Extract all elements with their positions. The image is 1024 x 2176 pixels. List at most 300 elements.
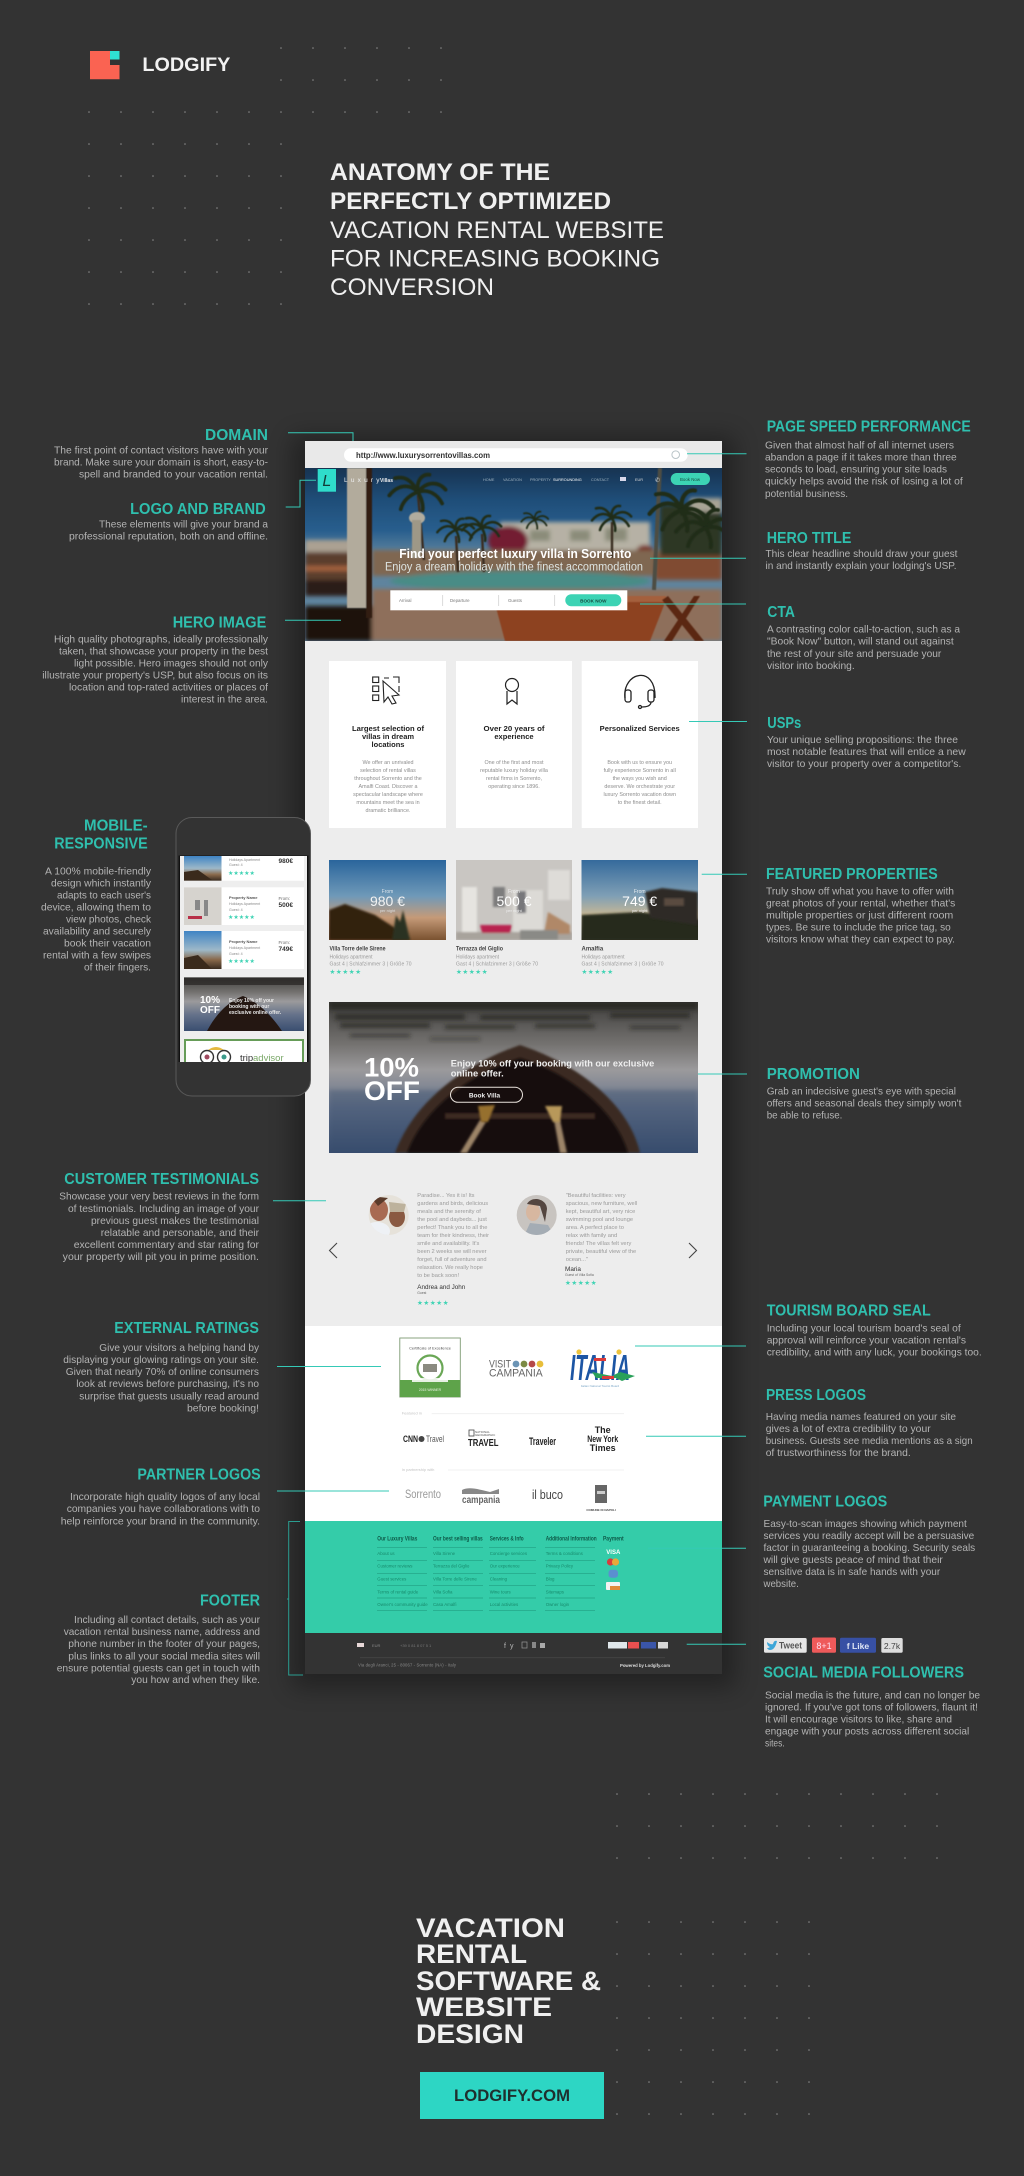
annotation: customer testimonials: excellent commentary and star rating for <box>74 1239 259 1251</box>
testimonials carousel: relaxation. We really hope <box>417 1265 483 1271</box>
teal footer: Our experience <box>490 1564 520 1569</box>
dark footer bar: Via degli Aranci, 25 - 80067 - Sorrento (NA) - Italy <box>358 1663 457 1668</box>
USP card 3: fully experience Sorrento in all <box>604 768 676 774</box>
certificate of excellence: Certificate of Excellence <box>409 1346 451 1350</box>
hero backdrop <box>305 498 722 641</box>
nav: CONTACT <box>591 478 610 482</box>
icon: grid and cursor <box>373 677 399 704</box>
featured property 2 <box>456 860 572 976</box>
annotation: press logos: PRESS LOGOS <box>766 1387 866 1404</box>
press logos: GEOGRAPHIC <box>475 1433 496 1437</box>
teal footer: Owner's community guide <box>377 1602 428 1607</box>
annotation: payment logos: services you readily accept will be a persuasive <box>764 1530 974 1542</box>
featured property 2: ★★★★★ <box>456 968 488 976</box>
website mockup <box>305 441 735 1674</box>
testimonials carousel: forget, full of adventure and <box>417 1257 487 1263</box>
annotation: featured properties: visitors know what they can expect to pay. <box>766 934 955 946</box>
mobile promo: OFF <box>200 1005 220 1016</box>
mobile promo: Enjoy 10% off your <box>229 998 274 1004</box>
annotation: external ratings: surprise that guests usually read around <box>79 1390 259 1402</box>
title: PERFECTLY OPTIMIZED <box>330 188 611 215</box>
featured property 3: Amalfia <box>582 947 604 953</box>
annotation: usps <box>767 715 966 770</box>
annotation: footer: vacation rental business name, address and <box>64 1626 260 1638</box>
testimonials carousel: ★★★★★ <box>417 1299 449 1307</box>
brand logo: LODGIFY <box>142 54 230 76</box>
annotation: usps: most notable features that will entice a new <box>767 746 966 758</box>
USP card 1: locations <box>372 740 404 749</box>
featured property 2: Holidays apartment <box>456 954 500 960</box>
annotation: customer testimonials: relatable and personable, and their <box>101 1227 259 1239</box>
annotation: customer testimonials: your property will pit you in prime position. <box>63 1251 259 1263</box>
teal footer: Owner login <box>546 1602 570 1607</box>
press logos: TRAVEL <box>468 1437 499 1449</box>
tourism seals <box>400 1338 635 1397</box>
featured property 1: 980 € <box>370 893 405 909</box>
annotation: external ratings <box>63 1320 260 1414</box>
hero image: EUR <box>635 478 643 482</box>
USP card 2 <box>456 661 572 828</box>
featured property 3: Gast 4 | Schlafzimmer 3 | Größe 70 <box>582 962 664 968</box>
annotation: press logos <box>766 1387 973 1459</box>
mobile listing 3: ★★★★★ <box>228 958 255 965</box>
icon: award ribbon <box>506 678 518 704</box>
USP card 1 <box>329 661 446 828</box>
connector lines left <box>273 433 389 1675</box>
annotation: social media followers: sites. <box>765 1737 785 1749</box>
teal footer: Privacy Policy <box>546 1564 574 1569</box>
dark footer bar <box>305 1633 722 1674</box>
teal footer: Villa Sofia <box>433 1589 453 1594</box>
icon: headset <box>625 675 655 708</box>
call to action: lodgify.com: LODGIFY.COM <box>454 2086 570 2105</box>
teal footer: Concierge services <box>490 1551 528 1556</box>
annotation: mobile-responsive: A 100% mobile-friendly <box>45 866 152 878</box>
italia logo: Italian National Tourist Board <box>581 1384 619 1388</box>
annotation: domain: DOMAIN <box>205 427 268 444</box>
featured property 3: 749 € <box>622 893 657 909</box>
dark footer bar: Powered by Lodgify.com <box>620 1663 670 1669</box>
closing headline: RENTAL <box>416 1939 527 1969</box>
annotation: mobile-responsive: adapts to each user's <box>57 890 151 902</box>
testimonials carousel: relax with family and <box>566 1233 617 1239</box>
annotation: press logos: Having media names featured on your site <box>766 1411 956 1423</box>
annotation: footer: plus links to all your social media sites will <box>68 1650 260 1662</box>
mobile listing 3: 749€ <box>278 946 293 953</box>
USP card 1: mountains meet the sea in <box>356 800 420 806</box>
annotation: footer: Including all contact details, such as your <box>74 1614 260 1626</box>
dark footer bar: EUR <box>372 1643 381 1648</box>
annotation: external ratings: look at reviews before purchasing, it's no <box>76 1378 259 1390</box>
annotation: promotion: be able to refuse. <box>767 1109 842 1121</box>
annotation: payment logos: factor in guaranteeing a booking. Security seals <box>764 1542 975 1554</box>
avatar two <box>516 1195 558 1236</box>
dark footer bar: +39 0 81 8 07 5 1 <box>400 1643 432 1648</box>
visit campania logo: VISIT <box>489 1359 511 1371</box>
annotation: featured properties: types. Be sure to include the price tag, so <box>766 922 951 934</box>
annotation: cta: the rest of your site and persuade your <box>767 648 942 660</box>
title: ANATOMY OF THE <box>330 159 550 186</box>
press logos: New York <box>587 1434 619 1444</box>
mobile tripadvisor badge: advisor <box>253 1053 284 1064</box>
browser bar: http://www.luxurysorrentovillas.com <box>356 450 490 460</box>
USP card 2: Over 20 years of <box>484 724 545 733</box>
annotation: tourism board seal: TOURISM BOARD SEAL <box>767 1303 931 1320</box>
press logos <box>402 1410 624 1453</box>
annotation: payment logos: sensitive data is in safe hands with your <box>764 1566 941 1578</box>
hero image: ✆ <box>655 477 660 484</box>
italia logo <box>570 1347 635 1388</box>
dot pattern: top <box>88 47 442 305</box>
nav <box>483 478 609 481</box>
annotation: logo and brand: professional reputation, both on and offline. <box>69 531 268 543</box>
annotation: hero title <box>766 530 958 572</box>
visit campania logo <box>489 1359 543 1380</box>
teal footer: Sitemaps <box>546 1589 565 1594</box>
mobile promo <box>184 977 304 1031</box>
hero foreground <box>347 468 735 641</box>
teal footer: Villa Torre delle Sirene <box>433 1577 477 1582</box>
featured property 1: Villa Torre delle Sirene <box>330 947 386 953</box>
teal footer: Local activities <box>490 1602 519 1607</box>
dot pattern: bottom <box>616 1793 938 2115</box>
hero title text <box>385 547 643 574</box>
featured property 1: ★★★★★ <box>330 968 362 976</box>
testimonials carousel: kept, beautiful art, very nice <box>566 1209 635 1215</box>
featured property 2: 500 € <box>496 893 532 909</box>
annotation: promotion: offers and seasonal deals they simply won't <box>767 1097 961 1109</box>
annotation: page speed performance <box>765 418 971 500</box>
annotation: hero image: location and top-rated activities or places of <box>69 682 268 694</box>
mobile listing 2: From: <box>278 896 290 901</box>
book now button <box>671 473 710 485</box>
logo badge: L <box>322 473 331 490</box>
closing headline: SOFTWARE & <box>416 1966 601 1996</box>
teal footer: Our Luxury Villas <box>377 1537 418 1543</box>
testimonials carousel: friends! The villas felt very <box>566 1241 631 1247</box>
annotation: domain <box>54 427 268 481</box>
site shadow <box>292 436 735 1688</box>
annotation: logo and brand <box>69 501 268 543</box>
book villa button <box>450 1087 522 1102</box>
annotation: cta: CTA <box>767 604 795 621</box>
annotation: featured properties: multiple properties or just different room <box>766 910 954 922</box>
press logos: Traveler <box>529 1436 556 1448</box>
partner logos <box>402 1467 624 1512</box>
annotation: page speed performance: seconds to load, ensuring your site loads <box>765 464 947 476</box>
promotion banner: Enjoy 10% off your booking with our exclusive <box>451 1059 654 1070</box>
teal footer: Wine tours <box>490 1589 511 1594</box>
partner logos: il buco <box>532 1487 563 1502</box>
annotation: customer testimonials: of testimonials. Including an image of your <box>68 1203 259 1215</box>
testimonials carousel: the pool and daybeds... just <box>417 1217 487 1223</box>
testimonials carousel: Guest <box>417 1291 426 1295</box>
hero image: Luxury <box>344 477 383 484</box>
testimonials carousel: swimming pool and lounge <box>566 1217 633 1223</box>
annotation: partner logos: Incorporate high quality logos of any local <box>70 1491 260 1503</box>
teal footer: Payment <box>603 1537 624 1543</box>
grey content area <box>305 641 722 1326</box>
annotation: partner logos: PARTNER LOGOS <box>137 1466 261 1483</box>
USP card 1: selection of rental villas <box>360 768 416 774</box>
mobile listing 1: ★★★★★ <box>228 870 255 877</box>
annotation: partner logos: companies you have collaborations with to <box>67 1503 260 1515</box>
annotation: tourism board seal: Including your local tourism board's seal of <box>767 1322 961 1334</box>
booking form: Arrival <box>399 598 411 603</box>
testimonials carousel: gardens and birds, delicious <box>417 1201 488 1207</box>
annotation: mobile-responsive: of their fingers. <box>84 962 151 974</box>
USP card 3: Book with us to ensure you <box>607 760 672 766</box>
featured property 3: ★★★★★ <box>582 968 614 976</box>
annotation: footer: FOOTER <box>200 1592 260 1609</box>
annotation: press logos: business. Guests see media mentions as a sign <box>766 1435 973 1447</box>
annotation: partner logos: help reinforce your brand in the community. <box>61 1515 260 1527</box>
social share buttons: 2.7k <box>884 1641 901 1651</box>
annotation: logo and brand: LOGO AND BRAND <box>130 501 266 518</box>
annotation: customer testimonials: Showcase your very best reviews in the form <box>59 1191 259 1203</box>
teal footer: Terms of rental guide <box>377 1589 419 1594</box>
closing headline <box>416 1913 601 2049</box>
visit campania logo: CAMPANIA <box>489 1368 543 1380</box>
USP card 2: One of the first and most <box>484 760 544 766</box>
testimonials carousel: Guest of Villa Sofia <box>565 1273 594 1277</box>
annotation: footer: phone number in the footer of your pages, <box>68 1638 260 1650</box>
title: CONVERSION <box>330 274 494 301</box>
USP card 1: throughout Sorrento and the <box>354 776 422 782</box>
promotion banner: online offer. <box>451 1069 504 1080</box>
italia logo: ITALIA <box>570 1347 630 1388</box>
connector lines right <box>635 454 747 1644</box>
mobile listing 1 <box>184 856 304 881</box>
teal footer: Terms & conditions <box>546 1551 584 1556</box>
press logos: Featured in <box>402 1410 422 1415</box>
featured property 3: From <box>634 889 646 895</box>
annotation: tourism board seal: approval will reinforce your vacation rental's <box>767 1334 966 1346</box>
testimonials carousel: spacious, new furniture, well <box>566 1201 637 1207</box>
USP card 1: villas in dream <box>362 732 414 741</box>
annotation: usps: visitor to your property over a competitor's. <box>767 758 961 770</box>
social share buttons: 8+1 <box>816 1641 832 1651</box>
annotation: hero image: High quality photographs, ideally professionally <box>54 634 269 646</box>
featured property 3 <box>582 860 700 976</box>
mobile listing 3: Property Name <box>229 939 258 944</box>
testimonials carousel: Maria <box>565 1266 581 1273</box>
phone mockup <box>176 818 310 1096</box>
title: FOR INCREASING BOOKING <box>330 246 660 273</box>
annotation: cta <box>767 604 960 672</box>
featured property 2: per night <box>506 908 523 913</box>
USP card 2: experience <box>494 732 534 741</box>
annotation: hero title: HERO TITLE <box>767 530 851 547</box>
teal footer: Customer reviews <box>377 1564 413 1569</box>
mobile listing 3: From: <box>278 940 290 945</box>
annotation: promotion: Grab an indecisive guest's eye with special <box>767 1085 956 1097</box>
closing headline: VACATION <box>416 1913 565 1943</box>
annotation: social media followers: Social media is the future, and can no longer be <box>765 1689 980 1701</box>
annotation: page speed performance: quickly helps avoid the risk of losing a lot of <box>765 476 963 488</box>
certificate of excellence: 2015 WINNER <box>419 1388 442 1392</box>
USP card 1: spectacular landscape where <box>353 792 423 798</box>
annotation: footer: you how and when they like. <box>131 1674 260 1686</box>
annotation: payment logos <box>763 1494 975 1590</box>
booking form <box>390 590 627 610</box>
featured property 3: per night <box>632 908 648 913</box>
testimonials carousel: team for their kindness, their <box>417 1233 489 1239</box>
booking form: Departure <box>450 598 470 603</box>
nav: PROPERTY <box>530 478 551 482</box>
mobile listing 3 <box>184 931 304 969</box>
partner logos: campania <box>462 1495 500 1506</box>
annotation: mobile-responsive: rental with a few swipes <box>43 950 151 962</box>
annotation: mobile-responsive: RESPONSIVE <box>54 835 148 852</box>
annotation: partner logos <box>61 1466 261 1527</box>
teal footer: Additional Information <box>546 1537 597 1543</box>
annotation: social media followers: engage with your posts across different social <box>765 1725 969 1737</box>
annotation: usps: Your unique selling propositions: the three <box>767 734 958 746</box>
annotation: domain: The first point of contact visitors have with your <box>54 445 268 457</box>
annotation: mobile-responsive: view photos, check <box>66 914 152 926</box>
annotation: payment logos: website. <box>763 1578 799 1590</box>
USP card 3: luxury Sorrento vacation down <box>603 792 676 798</box>
USP card 1: We offer an unrivaled <box>362 760 414 766</box>
annotation: logo and brand: These elements will give your brand a <box>99 518 268 530</box>
mobile listing 1: Holidays Apartment <box>229 858 260 862</box>
mobile listing 2: Property Name <box>229 895 258 900</box>
USP card 2: reputable luxury holiday villa <box>480 768 548 774</box>
annotation: hero image: interest in the area. <box>181 694 268 706</box>
featured property 3: Holidays apartment <box>582 954 625 960</box>
annotation: domain: spell and branded to your vacation rental. <box>79 469 268 481</box>
book now button: Book Now <box>680 477 701 482</box>
USP card 3: the ways you wish and <box>613 776 667 782</box>
annotation: mobile-responsive: book their vacation <box>64 938 151 950</box>
social share buttons <box>764 1638 903 1653</box>
hero title text: Find your perfect luxury villa in Sorrento <box>399 547 632 561</box>
partner logos: Sorrento <box>405 1487 441 1501</box>
partner logos: COMUNE DI NAPOLI <box>586 1508 616 1512</box>
annotation: page speed performance: Given that almost half of all internet users <box>765 440 954 452</box>
hero image: Villas <box>380 478 393 484</box>
social icons: fy <box>504 1643 517 1650</box>
annotation: external ratings: Given that nearly 70% of online consumers <box>66 1366 259 1378</box>
testimonials carousel <box>330 1193 696 1307</box>
arrows <box>330 1243 337 1258</box>
annotation: cta: A contrasting color call-to-action, such as a <box>767 624 960 636</box>
annotation: external ratings: Give your visitors a helping hand by <box>99 1342 260 1354</box>
testimonials carousel: been 2 weeks we will never <box>417 1249 487 1255</box>
annotation: featured properties: Truly show off what you have to offer with <box>766 885 954 897</box>
social share buttons: Tweet <box>779 1640 802 1650</box>
logo badge <box>318 469 336 492</box>
testimonials carousel: Paradise... Yes it is! Its <box>417 1193 475 1199</box>
social share buttons: f Like <box>847 1641 869 1651</box>
USP card 3: Personalized Services <box>600 724 680 733</box>
annotation: promotion <box>767 1066 961 1121</box>
certificate of excellence <box>400 1338 460 1397</box>
press logos: NATIONAL <box>475 1430 490 1434</box>
teal footer: Terrazza del Giglio <box>433 1564 470 1569</box>
annotation: mobile-responsive: device, allowing them to <box>41 902 151 914</box>
annotation: usps: USPs <box>767 715 801 732</box>
annotation: hero image <box>42 614 269 706</box>
browser bar <box>305 441 722 468</box>
USP card 1: Amalfi Coast. Discover a <box>358 784 418 790</box>
annotation: mobile-responsive: MOBILE- <box>84 818 148 835</box>
mobile listing 2: 500€ <box>278 902 293 909</box>
testimonials carousel: perfect! Thank you to all the <box>417 1225 487 1231</box>
title <box>330 159 664 301</box>
annotation: tourism board seal: credibility, and with any luck, your bookings too. <box>767 1346 982 1358</box>
payment icons <box>606 1550 621 1590</box>
booking form: Guests <box>508 598 523 603</box>
annotation: mobile-responsive <box>41 818 152 974</box>
annotation: hero image: light possible. Hero images should not only <box>74 658 269 670</box>
teal footer: About us <box>377 1551 395 1556</box>
USP card 2: operating since 1896. <box>488 784 540 790</box>
annotation: footer <box>57 1592 260 1686</box>
annotation: page speed performance: PAGE SPEED PERFORMANCE <box>767 418 971 435</box>
teal footer: Villa Sirene <box>433 1551 456 1556</box>
mobile promo: booking with our <box>229 1004 269 1010</box>
annotation: external ratings: before booking! <box>187 1402 259 1414</box>
annotation: press logos: of trustworthiness for the brand. <box>766 1447 911 1459</box>
promotion banner: OFF <box>364 1076 420 1106</box>
annotation: hero title: in and instantly explain your lodging's USP. <box>766 560 956 572</box>
annotation: payment logos: will give guests peace of mind that their <box>763 1554 943 1566</box>
testimonials carousel: to be back soon! <box>417 1273 459 1279</box>
annotation: mobile-responsive: design which instantly <box>51 878 152 890</box>
annotation: cta: "Book Now" button, will stand out against <box>767 636 954 648</box>
annotation: customer testimonials <box>59 1171 259 1263</box>
annotation: domain: brand. Make sure your domain is short, easy-to- <box>54 457 268 469</box>
featured property 1: Holidays apartment <box>330 954 373 960</box>
USP card 3: to the finest detail. <box>618 800 662 806</box>
annotation: payment logos: Easy-to-scan images showing which payment <box>764 1518 967 1530</box>
testimonials carousel: area. A perfect place to <box>566 1225 624 1231</box>
mobile listing 2: Guest: 4 <box>229 908 243 912</box>
mobile listing 1: Guest: 4 <box>229 863 243 867</box>
nav: VACATION <box>503 478 522 482</box>
boat <box>395 1045 640 1153</box>
mobile tripadvisor badge <box>184 1039 304 1062</box>
title: VACATION RENTAL WEBSITE <box>330 217 664 244</box>
featured property 2: Terrazza del Giglio <box>456 947 503 953</box>
annotation: promotion: PROMOTION <box>767 1066 860 1083</box>
annotation: external ratings: displaying your glowing ratings on your site. <box>63 1354 259 1366</box>
mobile listing 3: Guest: 4 <box>229 952 243 956</box>
annotation: page speed performance: potential business. <box>765 488 848 500</box>
annotation: social media followers <box>763 1665 980 1749</box>
promotion banner <box>329 1001 698 1153</box>
annotation: featured properties <box>766 866 955 946</box>
featured property 1: per night <box>380 908 396 913</box>
annotation: social media followers: It will encourage visitors to like, share and <box>765 1713 952 1725</box>
mobile listing 1: 980€ <box>278 858 293 865</box>
testimonials carousel: ★★★★★ <box>565 1279 597 1287</box>
call to action: lodgify.com <box>420 2072 604 2119</box>
annotation: social media followers: SOCIAL MEDIA FOLLOWERS <box>763 1665 964 1682</box>
USP card 3: deserve. We orchestrate your <box>604 784 675 790</box>
annotation: page speed performance: abandon a page if it takes more than three <box>765 452 957 464</box>
featured property 2: Gast 4 | Schlafzimmer 3 | Größe 70 <box>456 962 538 968</box>
testimonials carousel: private, beautiful view of the <box>566 1249 636 1255</box>
annotation: external ratings: EXTERNAL RATINGS <box>114 1320 259 1337</box>
mobile tripadvisor badge: trip <box>240 1053 253 1064</box>
teal footer: Casa Amalfi <box>433 1602 456 1607</box>
closing headline: WEBSITE <box>416 1992 552 2022</box>
USP card 2: rental firms in Sorrento, <box>486 776 543 782</box>
teal footer: Our best selling villas <box>433 1537 483 1543</box>
